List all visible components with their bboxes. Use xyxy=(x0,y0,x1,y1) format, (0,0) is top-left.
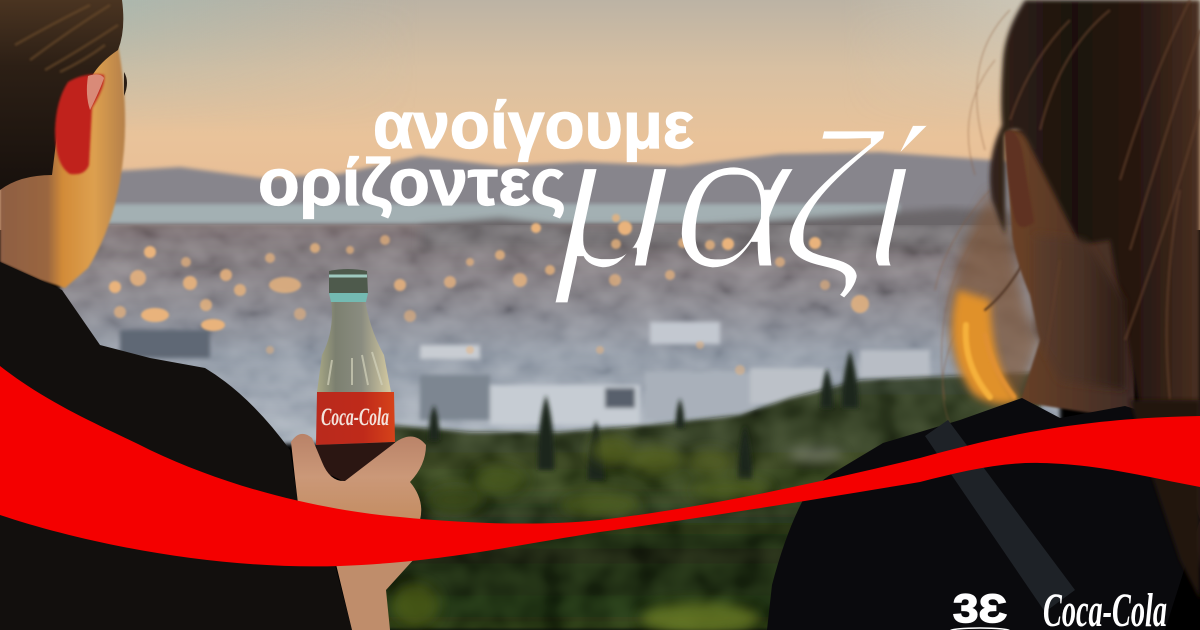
hair highlights xyxy=(15,5,118,72)
trees xyxy=(380,350,1040,630)
strap xyxy=(925,420,1075,612)
ear xyxy=(1005,131,1034,227)
ear xyxy=(55,74,104,174)
logo: 3E: 3Ɛ xyxy=(953,587,1007,630)
sky xyxy=(0,0,1200,230)
lip xyxy=(329,269,368,294)
city texture xyxy=(60,225,1060,440)
hair xyxy=(990,0,1200,570)
left person xyxy=(0,0,415,630)
cypress trees xyxy=(429,350,858,480)
lower hair xyxy=(1035,235,1125,390)
eyelash xyxy=(124,72,127,96)
glow core xyxy=(952,290,1020,404)
back hair over shirt xyxy=(1130,400,1200,600)
distant hill xyxy=(420,208,1060,250)
wispy hair xyxy=(935,10,1010,425)
red swoosh xyxy=(0,366,1200,566)
hair xyxy=(0,0,123,190)
tree texture xyxy=(380,370,1040,630)
cola xyxy=(316,442,395,482)
label xyxy=(316,392,395,445)
city xyxy=(60,208,1060,444)
shirt xyxy=(0,262,352,630)
bottle xyxy=(316,269,395,482)
hand xyxy=(291,434,426,520)
bottle neck and shoulders xyxy=(317,300,391,392)
mazi word: μαζί xyxy=(551,95,933,309)
buildings xyxy=(120,322,930,425)
label logo: Coca-Cola xyxy=(321,404,389,431)
headline xyxy=(258,88,933,309)
neck and face xyxy=(0,45,125,288)
hair glow xyxy=(949,190,1040,404)
line two: ορίζοντες xyxy=(258,145,566,219)
neck xyxy=(1005,130,1135,420)
right person xyxy=(767,0,1200,630)
mountains xyxy=(100,152,1060,225)
forearm xyxy=(335,558,415,630)
glass reflections xyxy=(328,352,382,385)
foliage patches xyxy=(391,436,843,630)
line one: ανοίγουμε xyxy=(373,88,694,162)
sea xyxy=(100,204,900,226)
bokeh lights xyxy=(109,214,869,375)
hair strands xyxy=(1010,0,1200,400)
body xyxy=(767,398,1200,630)
